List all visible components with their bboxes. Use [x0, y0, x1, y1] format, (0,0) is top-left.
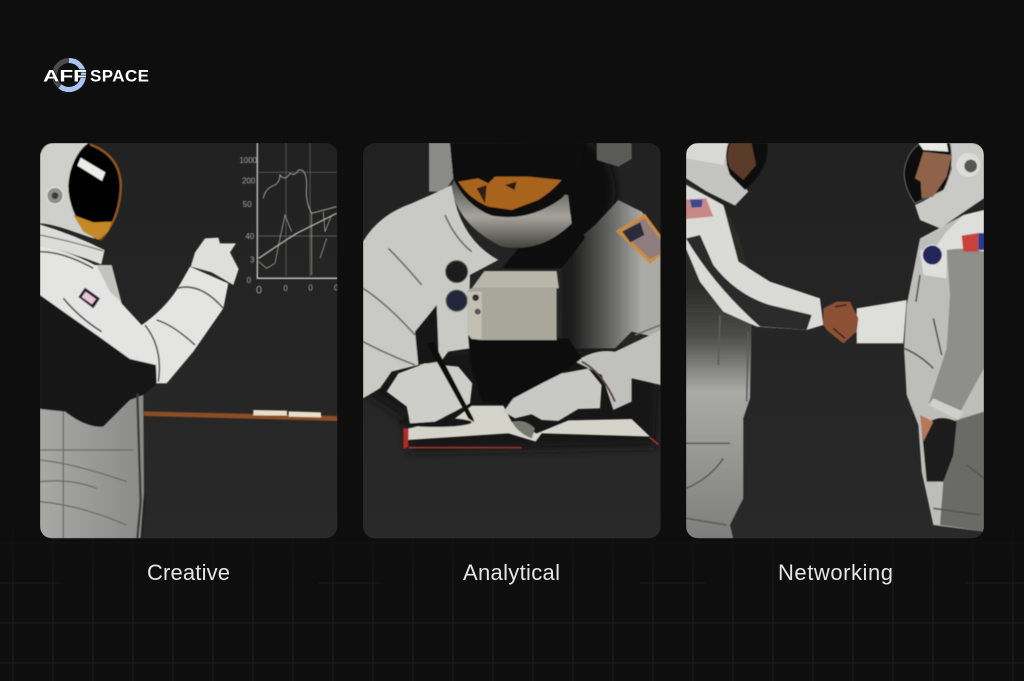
logo: AFF SPACE: SPACE: [90, 66, 149, 86]
trousers: [40, 393, 145, 538]
chest control box: [468, 271, 559, 340]
chart on chalkboard: 1000: [239, 156, 258, 165]
chart on chalkboard: 0: [334, 283, 339, 292]
chart on chalkboard: 0: [308, 283, 313, 292]
arm: [40, 245, 228, 383]
US flag patch: [616, 214, 661, 264]
chart on chalkboard: 0: [283, 284, 288, 293]
left astronaut: [686, 143, 823, 538]
shadow behind helmet: [566, 143, 618, 234]
panel: analytical astronaut writing: [363, 128, 661, 538]
shadow under astronaut: [363, 348, 661, 452]
dark torso: [40, 292, 157, 427]
book: [398, 406, 658, 449]
chest badges: [446, 261, 468, 311]
panel: creative astronaut at chalkboard: [40, 143, 339, 538]
chart on chalkboard: 0: [256, 285, 262, 297]
writing hand glove and pen: [387, 342, 474, 423]
glove: [191, 238, 239, 285]
right hand glove: [503, 368, 602, 421]
chalk tray: [144, 410, 337, 421]
helmet visor and neck ring: [450, 143, 585, 248]
suit body: [363, 185, 661, 410]
dark chest shadow: [468, 338, 582, 405]
chart on chalkboard: [239, 143, 339, 297]
chart on chalkboard: 40: [245, 232, 255, 241]
caption: Creative: Creative: [147, 560, 230, 585]
chart on chalkboard: 200: [242, 177, 256, 186]
logo: AFF SPACE: [43, 60, 149, 90]
right astronaut: [857, 143, 984, 532]
panel: networking astronauts handshake: [686, 143, 984, 538]
handshake: [823, 302, 858, 343]
arm patch: [78, 288, 100, 308]
collar: [40, 224, 105, 264]
chart on chalkboard: 50: [243, 200, 252, 209]
chart on chalkboard: 3: [250, 255, 255, 264]
chart on chalkboard: 0: [247, 276, 252, 285]
caption: Analytical: Analytical: [463, 560, 560, 585]
logo: AFF SPACE: AFF: [43, 66, 87, 86]
caption: Networking: Networking: [778, 560, 893, 585]
backpack shoulders: [429, 143, 632, 192]
helmet: [40, 143, 122, 241]
